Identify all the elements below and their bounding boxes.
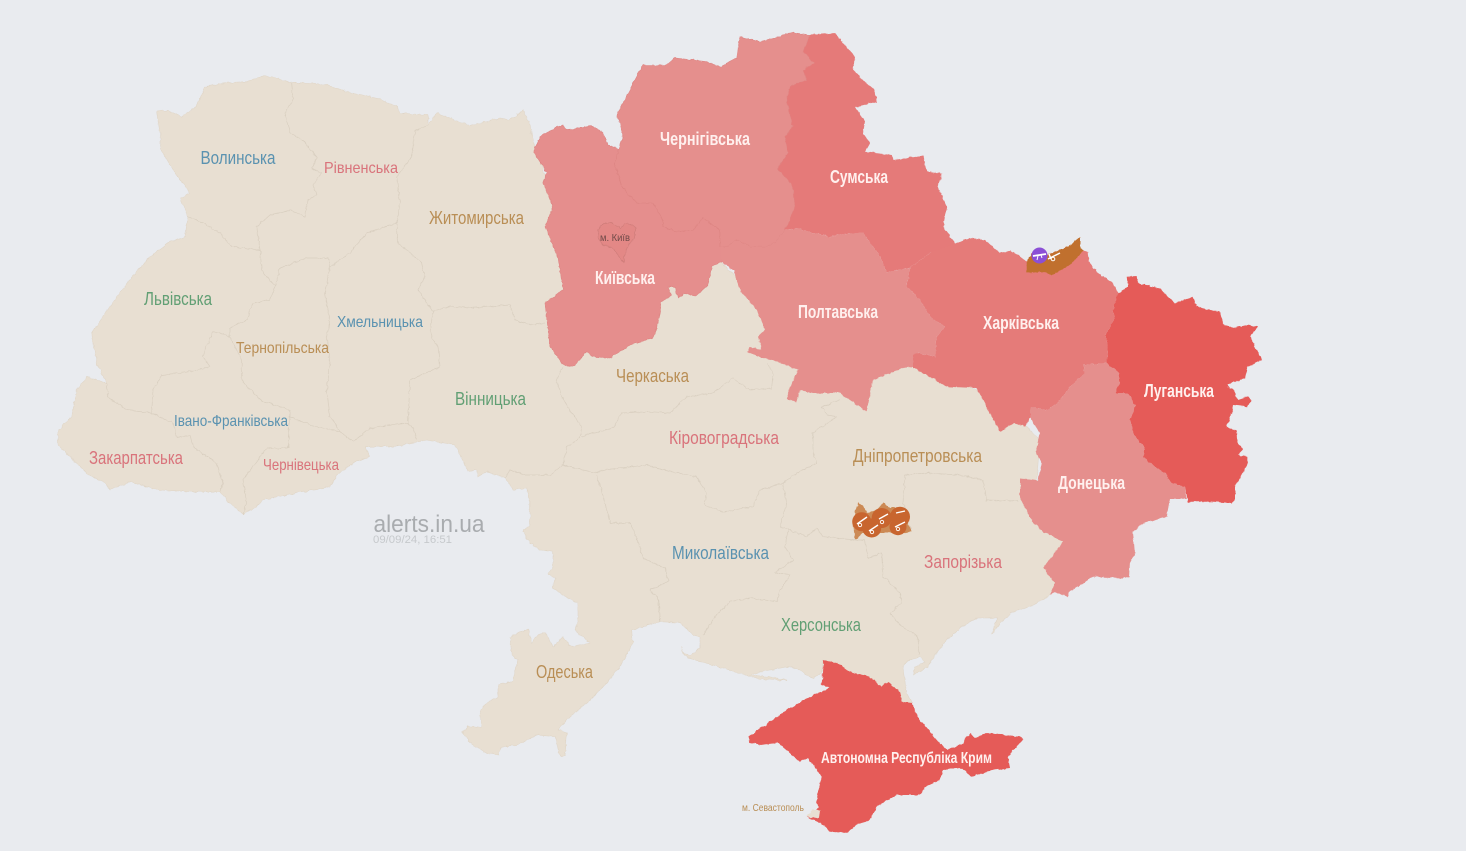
label: Chernivtsi: Чернівецька — [263, 457, 339, 474]
label: Luhansk: Луганська — [1144, 381, 1215, 401]
icon group: drone circles — [852, 507, 910, 538]
label: Sumy: Сумська — [830, 167, 889, 187]
region: Luhansk oblast — [1105, 276, 1262, 503]
map: calm oblasts silhouette — [58, 76, 1080, 757]
alarm area: Dnipropetrovsk district — [853, 503, 912, 540]
label: Vinnytsia: Вінницька — [455, 389, 527, 409]
watermark: site name: alerts.in.ua — [374, 511, 485, 538]
label: Ivano-Frankivsk: Івано-Франківська — [174, 413, 288, 430]
label: Lviv: Львівська — [144, 289, 213, 309]
alarm area: Kharkiv district — [1027, 237, 1083, 275]
region: Poltava oblast — [720, 228, 945, 412]
label: Ternopil: Тернопільська — [236, 340, 329, 357]
label: Dnipropetrovsk: Дніпропетровська — [853, 446, 983, 466]
region: Kharkiv oblast — [907, 238, 1118, 432]
oblast borders — [107, 83, 1018, 655]
label: Cherkasy: Черкаська — [616, 366, 690, 386]
label: Odesa: Одеська — [536, 662, 594, 682]
label: Chernihiv: Чернігівська — [660, 129, 751, 149]
label: Mykolaiv: Миколаївська — [672, 543, 770, 563]
region: Crimea — [748, 660, 1023, 833]
icon: rifle in purple circle — [1032, 248, 1048, 264]
map regions — [58, 33, 1262, 833]
label: Rivne: Рівненська — [324, 160, 398, 177]
label: Volyn: Волинська — [200, 148, 276, 168]
label: Khmelnytskyi: Хмельницька — [337, 314, 423, 331]
label: Kirovohrad: Кіровоградська — [669, 428, 780, 448]
watermark: timestamp: 09/09/24, 16:51 — [373, 534, 452, 546]
region: Sevastopol — [807, 810, 820, 818]
region: Kyiv oblast — [533, 125, 723, 367]
icon: drone — [1048, 253, 1060, 261]
region: Chernihiv oblast — [615, 33, 815, 247]
region: Sumy oblast — [778, 33, 955, 272]
region: Donetsk oblast — [1020, 363, 1187, 597]
label: Donetsk: Донецька — [1058, 473, 1126, 493]
region: Kyiv city — [598, 223, 635, 262]
label: Kharkiv: Харківська — [983, 313, 1060, 333]
label: Zaporizhzhia: Запорізька — [924, 552, 1003, 572]
label: Zhytomyr: Житомирська — [429, 208, 525, 228]
label: Kyiv oblast: Київська — [595, 268, 656, 288]
label: Kyiv city: м. Київ — [600, 233, 630, 244]
label: Kherson: Херсонська — [781, 615, 862, 635]
label: Poltava: Полтавська — [798, 302, 879, 322]
label: Crimea: Автономна Республіка Крим — [821, 750, 992, 767]
label: Zakarpattia: Закарпатська — [89, 448, 184, 468]
label: Sevastopol: м. Севастополь — [742, 803, 804, 814]
